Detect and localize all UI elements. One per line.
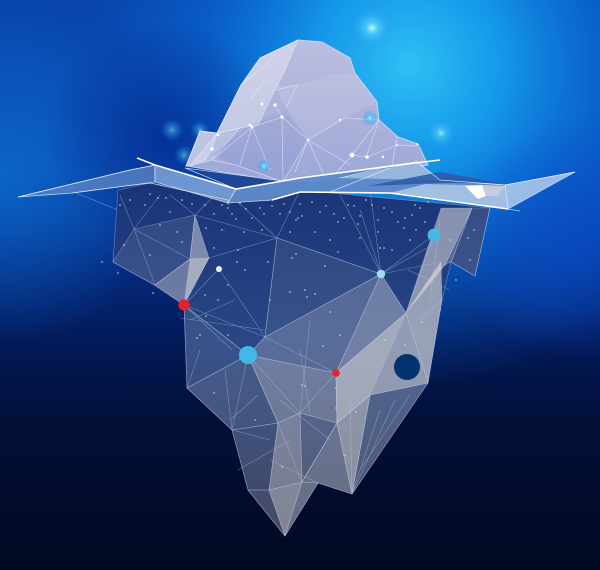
dark navy node [394, 354, 420, 380]
sparkle left [257, 159, 271, 173]
water surface sheet [18, 158, 575, 211]
glow lights [160, 6, 457, 165]
white node [216, 266, 222, 272]
pale blue node [377, 270, 385, 278]
right band top [340, 162, 440, 180]
specks [101, 193, 475, 468]
center band [228, 162, 508, 209]
submerged base shape [113, 183, 490, 536]
dark streak [368, 172, 500, 186]
peak facets [186, 40, 377, 180]
submerged iceberg [113, 183, 490, 536]
red node left [178, 299, 190, 311]
peak sparkle nodes [210, 103, 418, 173]
mesh lines [120, 190, 450, 494]
blue node upper right [428, 229, 440, 241]
red node small [332, 369, 340, 377]
peak base shape [186, 40, 428, 182]
white highlight [465, 185, 486, 199]
right pale band [390, 184, 508, 209]
left wing [18, 165, 155, 197]
dark pocket [185, 168, 283, 189]
light facets [113, 208, 490, 536]
blue node large [239, 346, 257, 364]
bright surface edges [137, 158, 508, 209]
right wing [505, 172, 575, 209]
nodes [178, 229, 440, 380]
sparkle right [362, 110, 378, 126]
iceberg above water [186, 40, 428, 182]
left band [155, 165, 236, 203]
underwater faint lines outside [76, 193, 490, 276]
